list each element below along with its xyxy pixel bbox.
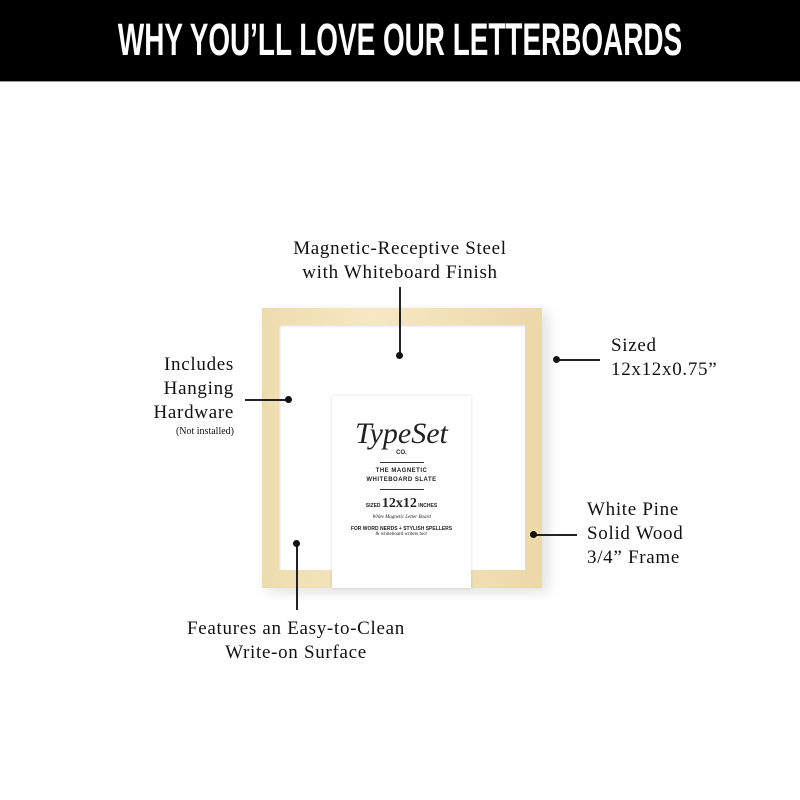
callout: wood (530, 499, 683, 568)
text: Magnetic-Receptive Steel (293, 238, 507, 259)
logo: TypeSet (355, 417, 448, 450)
product card (332, 396, 471, 588)
text: 12x12x0.75” (611, 359, 717, 380)
product card: & whiteboard writers too! (375, 532, 428, 537)
whiteboard surface (279, 325, 525, 570)
callout: hardware (154, 354, 292, 437)
product card: SIZED 12x12 INCHES (366, 496, 437, 511)
title: WHY YOU’LL LOVE OUR LETTERBOARDS (118, 14, 682, 65)
text: Hardware (154, 402, 234, 423)
text: with Whiteboard Finish (302, 262, 498, 283)
text: Solid Wood (587, 523, 683, 544)
text: 3/4” Frame (587, 547, 680, 568)
text: Features an Easy-to-Clean (187, 618, 405, 639)
callout: steel (293, 238, 507, 359)
product card: THE MAGNETIC (376, 468, 427, 474)
product card: FOR WORD NERDS + STYLISH SPELLERS (351, 526, 452, 532)
text: Write-on Surface (225, 642, 367, 663)
product card: WHITEBOARD SLATE (366, 477, 437, 483)
text: (Not installed) (176, 426, 234, 437)
text: Includes (164, 354, 234, 375)
product card: White Magnetic Letter Board (372, 515, 431, 520)
callout: surface (187, 540, 405, 663)
title bar (0, 0, 800, 82)
frame product (262, 308, 542, 588)
text: Hanging (164, 378, 234, 399)
text: White Pine (587, 499, 679, 520)
product card: CO. (396, 450, 407, 456)
text: Sized (611, 335, 657, 356)
callout: size (553, 335, 717, 380)
